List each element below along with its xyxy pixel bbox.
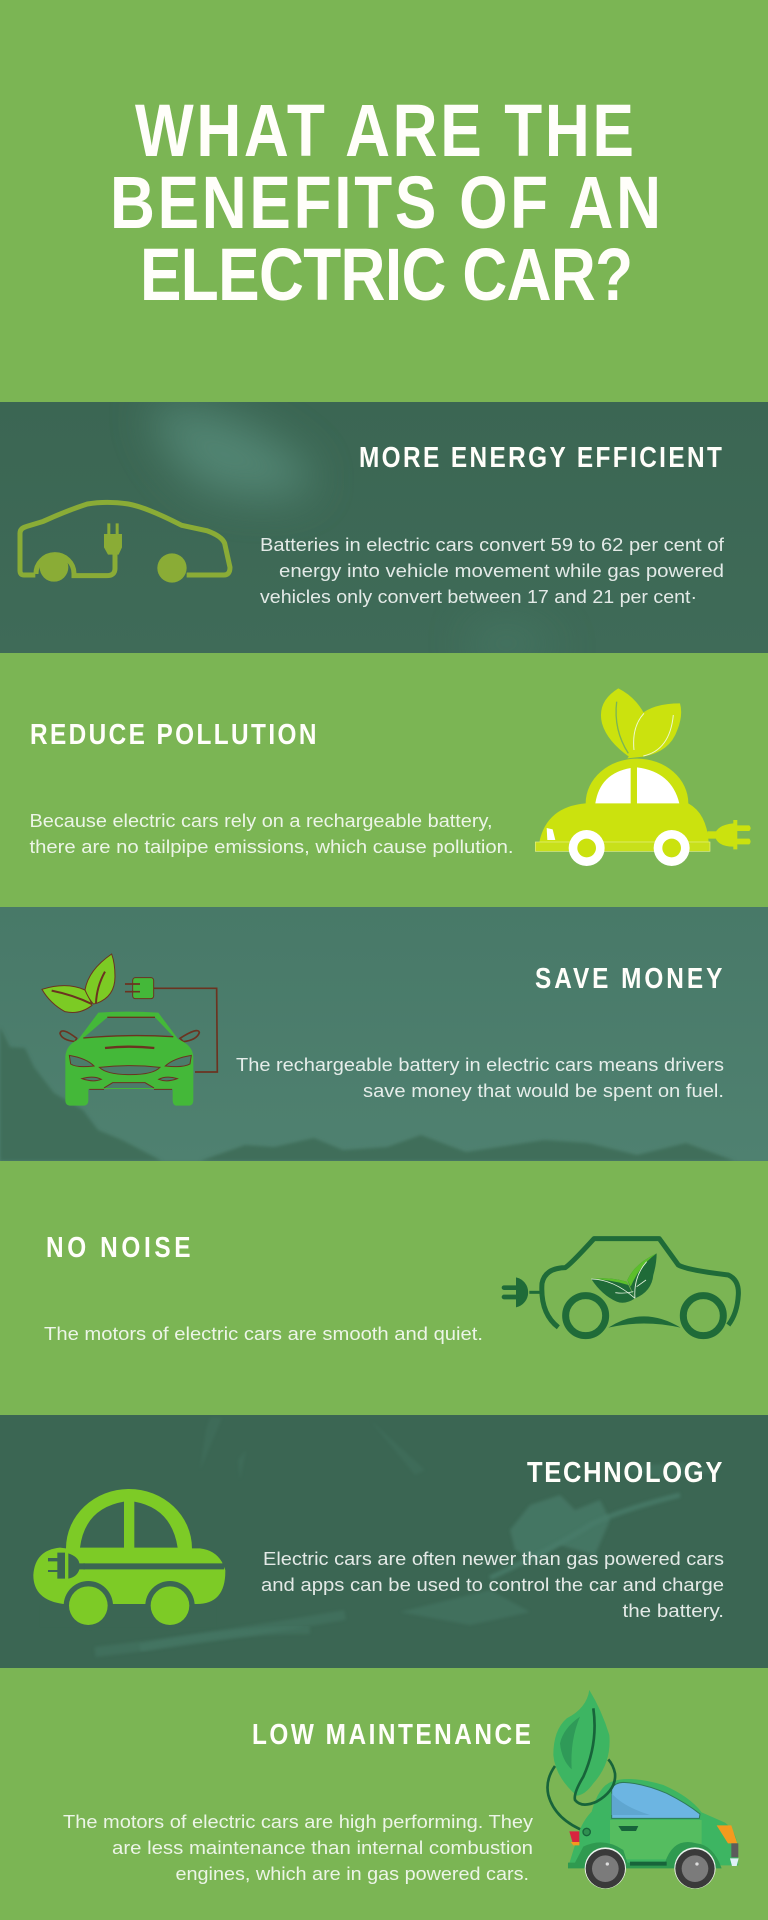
- icon: outline car with leaf: [504, 1239, 738, 1336]
- panel: more energy efficient: [0, 402, 768, 665]
- title: ELECTRIC CAR?: [140, 234, 633, 316]
- title: [110, 90, 661, 316]
- text: technology body: Electric cars are often newer than gas powered cars: [263, 1548, 724, 1569]
- text: no noise body: The motors of electric cars are smooth and quiet.: [44, 1323, 483, 1344]
- text: maintenance body: engines, which are in gas powered cars.: [176, 1863, 529, 1884]
- panel: save money: [0, 907, 768, 1161]
- icon: car outline with plug: [20, 502, 230, 583]
- text: save money body: [236, 1054, 724, 1101]
- heading: reduce pollution: REDUCE POLLUTION: [30, 718, 316, 750]
- heading: technology: TECHNOLOGY: [527, 1455, 722, 1488]
- title: BENEFITS OF AN: [110, 162, 661, 244]
- heading: more energy efficient: MORE ENERGY EFFICIENT: [359, 441, 722, 473]
- text: energy body: energy into vehicle movement while gas powered: [279, 560, 724, 581]
- text: maintenance body: The motors of electric cars are high performing. They: [63, 1811, 534, 1832]
- panel: low maintenance: [0, 1668, 768, 1920]
- text: pollution body: [30, 810, 514, 857]
- panel: reduce pollution: [0, 653, 768, 907]
- heading: save money: SAVE MONEY: [535, 962, 722, 994]
- icon: bright green car with plug: [33, 1489, 225, 1630]
- text: save money body: save money that would be spent on fuel.: [363, 1080, 724, 1101]
- text: energy body: vehicles only convert between 17 and 21 per cent·: [260, 586, 697, 607]
- text: energy body: Batteries in electric cars convert 59 to 62 per cent of: [260, 534, 725, 555]
- panel: title: [0, 0, 768, 402]
- heading: low maintenance: LOW MAINTENANCE: [252, 1718, 531, 1750]
- panel: technology: [0, 1415, 768, 1668]
- text: pollution body: Because electric cars rely on a rechargeable battery,: [30, 810, 492, 831]
- text: energy body: [260, 534, 725, 607]
- icon: green car with leaf and cable: [547, 1690, 739, 1889]
- title: WHAT ARE THE: [135, 90, 634, 172]
- panel: no noise: [0, 1161, 768, 1415]
- text: save money body: The rechargeable battery in electric cars means drivers: [236, 1054, 724, 1075]
- text: maintenance body: [63, 1811, 534, 1884]
- text: pollution body: there are no tailpipe emissions, which cause pollution.: [30, 836, 514, 857]
- text: maintenance body: are less maintenance than internal combustion: [112, 1837, 533, 1858]
- text: technology body: and apps can be used to control the car and charge: [261, 1574, 724, 1595]
- heading: no noise: NO NOISE: [46, 1231, 190, 1263]
- text: technology body: the battery.: [622, 1600, 724, 1621]
- icon: front car with leaves and cable: [42, 954, 217, 1106]
- text: technology body: [261, 1548, 724, 1621]
- icon: lime car with leaves: [535, 688, 751, 866]
